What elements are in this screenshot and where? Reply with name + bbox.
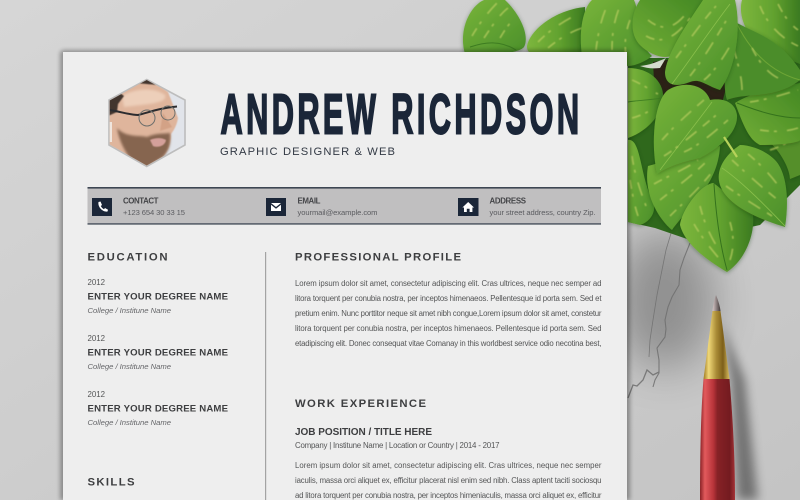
leaf: large upper <box>665 0 738 90</box>
work experience <box>295 398 602 500</box>
nose <box>160 113 172 131</box>
leaf: right upper <box>725 23 800 100</box>
resume paper <box>63 52 627 500</box>
contact item: phone: +123 654 30 33 15 <box>123 208 185 217</box>
education entry 3: College / Institune Name <box>88 418 171 427</box>
name title: ANDREW RICHDSON <box>220 82 579 146</box>
leaf: top third <box>581 0 652 66</box>
icon: phone <box>92 198 112 216</box>
job title: JOB POSITION / TITLE HERE <box>295 427 432 438</box>
contact item: address: your street address, country Zip. <box>490 208 596 217</box>
icon: house <box>458 198 478 216</box>
leaf: right middle <box>735 83 800 145</box>
beard <box>117 128 170 168</box>
face <box>110 80 178 166</box>
pen gold cone <box>704 311 730 379</box>
education entry 2: College / Institune Name <box>88 362 171 371</box>
profile text: litora torquent per conubia nostra, per inceptos himenaeos. Pellentesque id porta sem. Sed <box>295 324 602 333</box>
hair <box>108 79 156 116</box>
leaf: left upper <box>628 68 663 138</box>
leaf: top left <box>463 0 526 54</box>
job text: Lorem ipsum dolor sit amet, consectetur adipiscing elit. Cras ultrices, neque nec semper <box>295 461 602 470</box>
job text <box>295 461 602 500</box>
profile text: litora torquent per conubia nostra, per inceptos himenaeos. Pellentesque id porta sem. Sed et <box>295 294 602 303</box>
leaf: left lower <box>628 140 654 225</box>
education entry 2: 2012 <box>88 334 105 343</box>
profile heading: PROFESSIONAL PROFILE <box>295 252 461 264</box>
contact item: email: EMAIL <box>298 196 321 206</box>
job text: ad litora torquent per conubia nostra, per inceptos himeniaculis, massa orci aliquet ex, efficitur <box>295 491 602 500</box>
glasses <box>110 106 177 126</box>
education section <box>88 252 229 427</box>
job meta: Company | Institune Name | Location or Country | 2014 - 2017 <box>295 441 500 450</box>
education entry 2: ENTER YOUR DEGREE NAME <box>88 348 229 358</box>
profile text: etadipiscing elit. Donec consequat vitae Comanay in this worldbest service odio necotina best, <box>295 339 602 348</box>
plant dark backdrop <box>628 58 800 240</box>
leaf stem <box>724 137 737 157</box>
education entry 1: 2012 <box>88 278 105 287</box>
contact item: phone: CONTACT <box>123 196 159 206</box>
job text: iaculis, massa orci aliquet ex, efficitur placerat nisl enim sed nibh. Class aptent taciti sociosqu <box>295 476 602 485</box>
contact item: address <box>458 196 596 217</box>
lips <box>150 138 166 147</box>
portrait <box>105 79 185 170</box>
profile text <box>295 279 602 348</box>
leaf: top right <box>741 0 800 64</box>
leaf: bottom <box>680 183 753 272</box>
education entry 2 <box>88 334 229 371</box>
pen nib <box>712 295 720 311</box>
contact item: email <box>266 196 378 217</box>
soil <box>653 55 727 105</box>
ear highlight <box>110 122 112 142</box>
leaf: right lower <box>719 145 787 227</box>
pen <box>700 295 735 500</box>
forehead highlight <box>122 89 165 107</box>
pen shadow <box>721 322 758 500</box>
education entry 3: 2012 <box>88 390 105 399</box>
wall cracks <box>628 230 690 398</box>
contact item: email: yourmail@example.com <box>298 208 378 217</box>
profile text: pretium enim. Nunc porttitor neque sit amet nibh congue,Lorem ipsum dolor sit amet, constetur <box>295 309 602 318</box>
education entry 3: ENTER YOUR DEGREE NAME <box>88 404 229 414</box>
leaf: centre <box>654 85 737 174</box>
leaf: lower centre <box>647 146 720 230</box>
contact item: address: ADDRESS <box>490 196 526 206</box>
paper shadow <box>60 50 630 500</box>
plant <box>463 0 800 272</box>
column divider <box>265 252 266 500</box>
contact bar <box>88 187 601 225</box>
pot rim <box>640 58 666 68</box>
profile text: Lorem ipsum dolor sit amet, consectetur adipiscing elit. Cras ultrices, neque nec semper ad <box>295 279 602 288</box>
professional profile <box>295 252 602 348</box>
skills heading: SKILLS <box>88 477 135 489</box>
hexagon frame <box>109 80 185 166</box>
skin <box>110 82 178 166</box>
education heading: EDUCATION <box>88 252 168 264</box>
leaf: top fourth <box>632 0 706 57</box>
pen red barrel <box>700 379 735 500</box>
education entry 1 <box>88 278 229 315</box>
job subtitle: GRAPHIC DESIGNER & WEB <box>220 146 395 158</box>
education entry 3 <box>88 390 229 427</box>
education entry 1: College / Institune Name <box>88 306 171 315</box>
leaf: far right lower <box>750 122 800 179</box>
plant shadow on wall <box>615 230 715 370</box>
education entry 1: ENTER YOUR DEGREE NAME <box>88 292 229 302</box>
leaf: top second <box>527 7 585 54</box>
contact item: phone <box>92 196 185 217</box>
icon: envelope <box>266 198 286 216</box>
work heading: WORK EXPERIENCE <box>295 398 426 410</box>
